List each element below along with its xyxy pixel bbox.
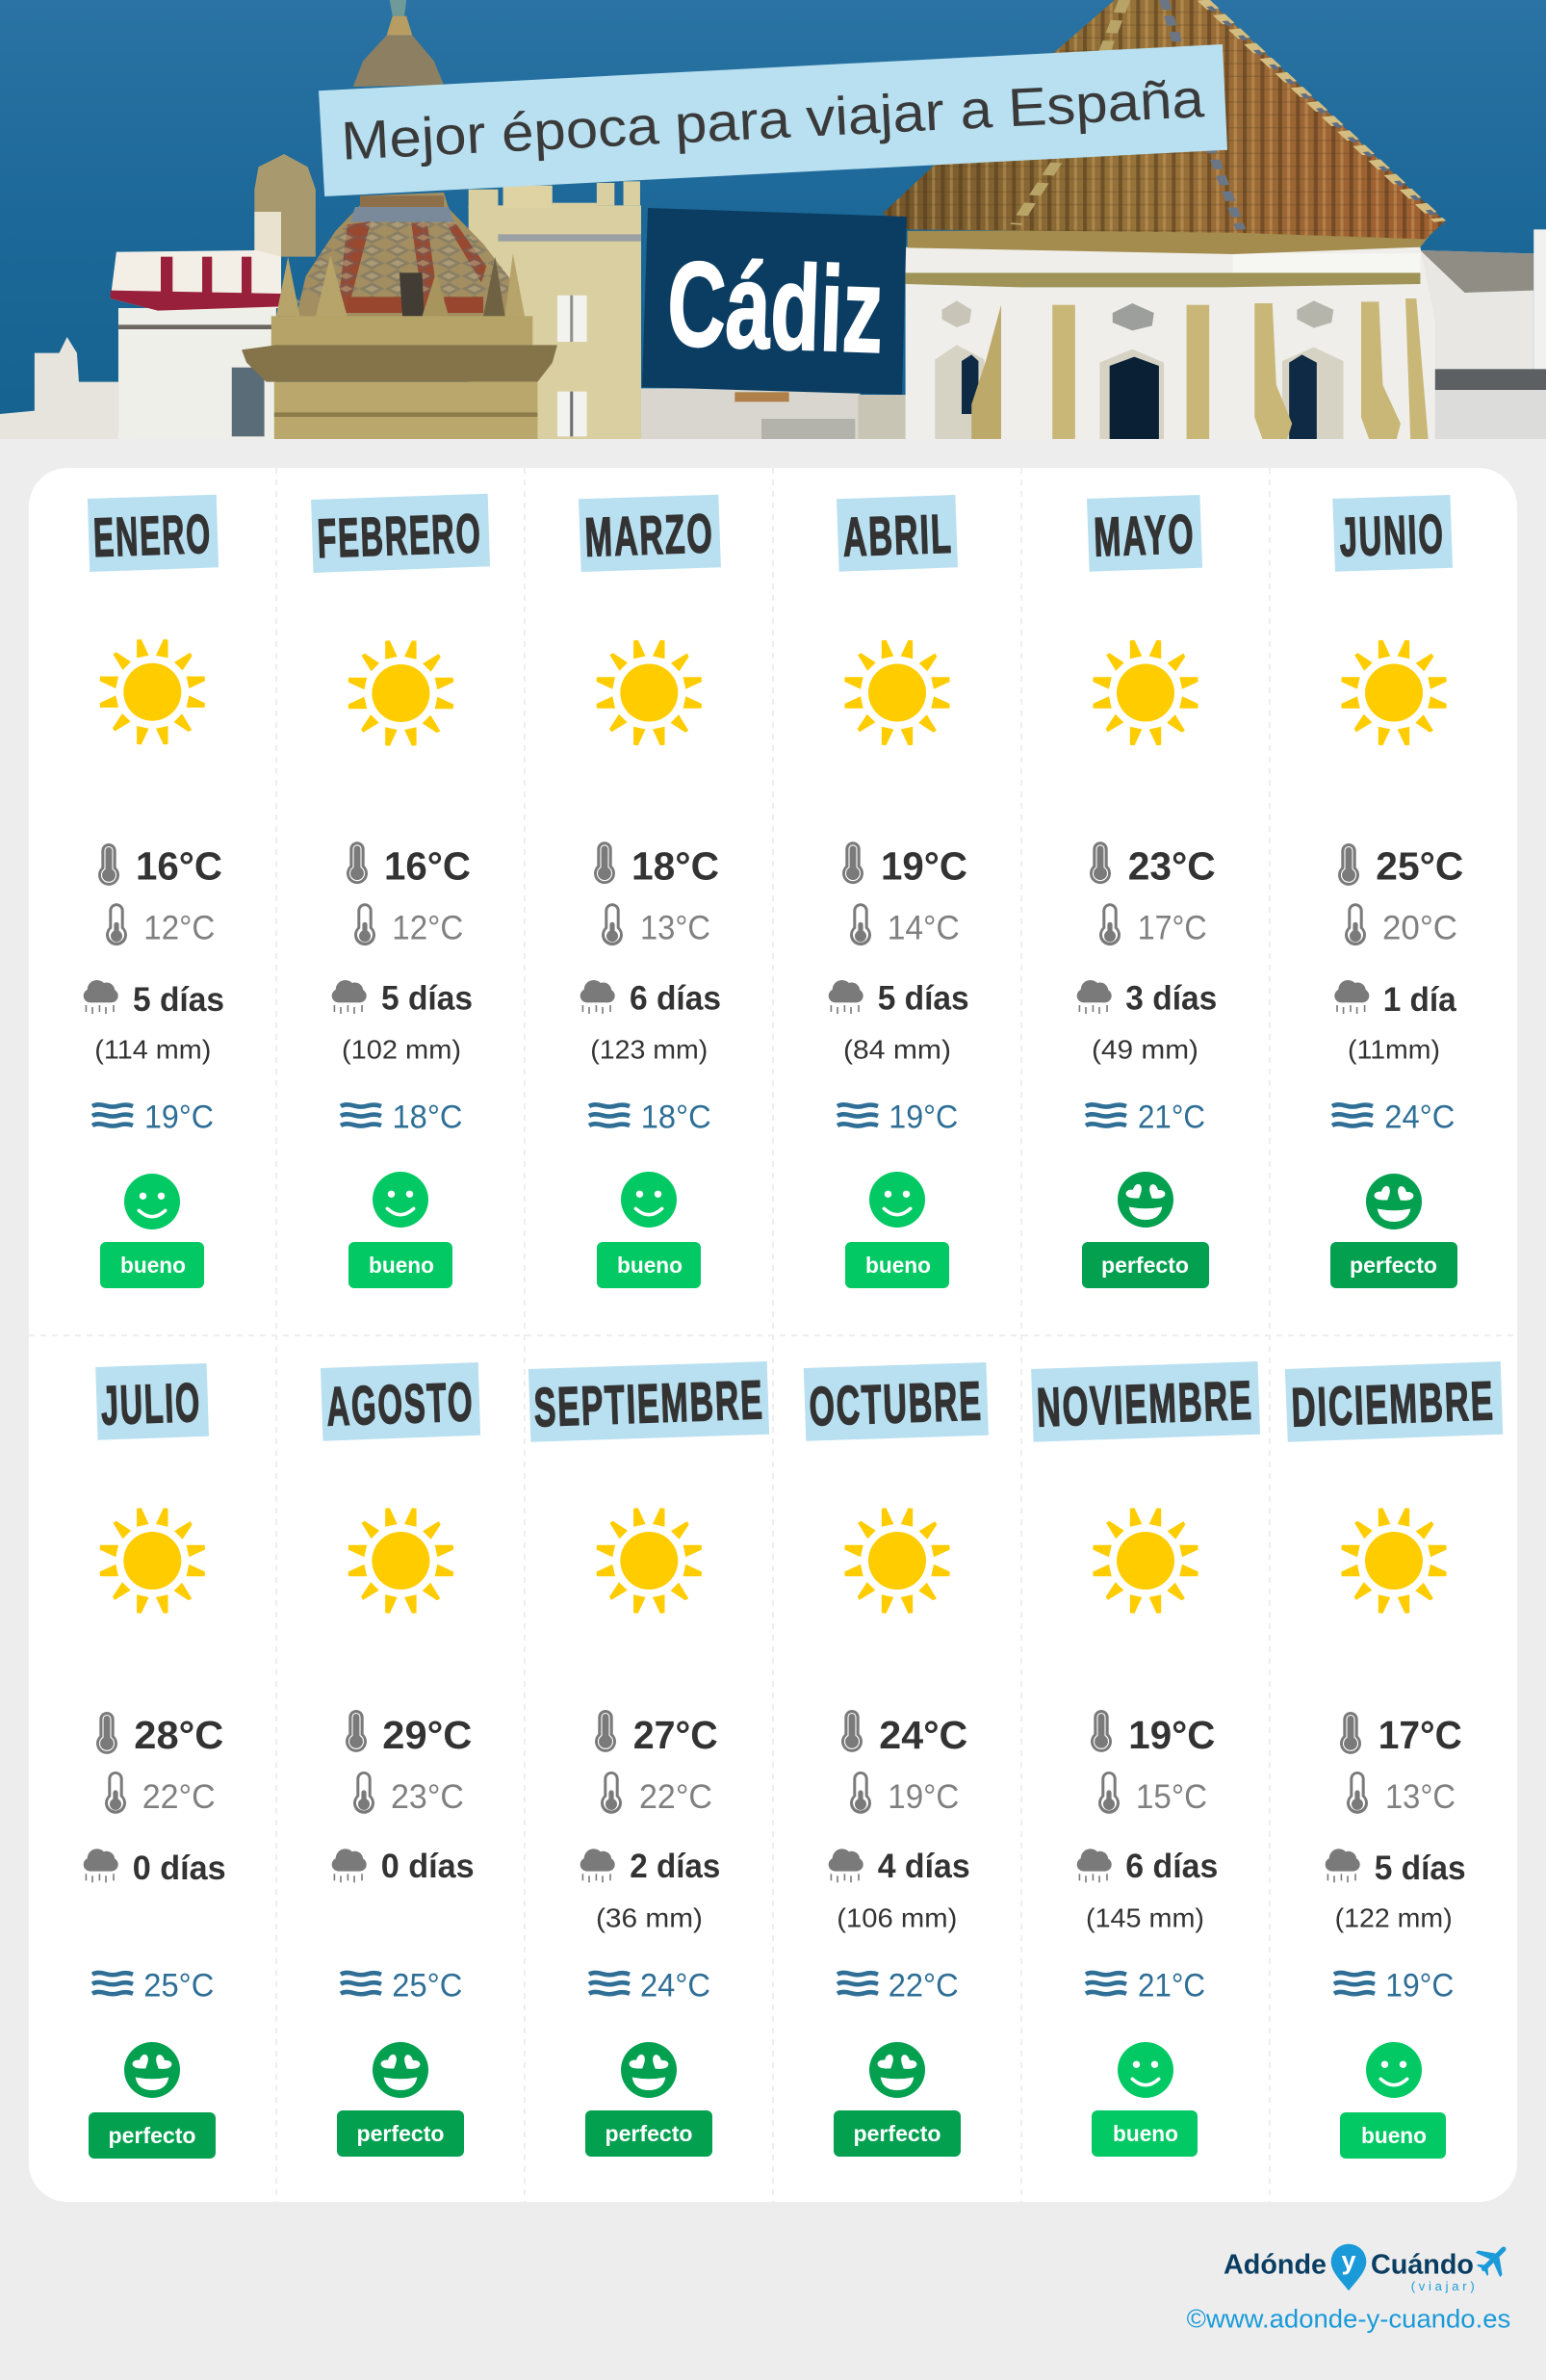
panel: noviembre [1031, 1361, 1260, 2157]
rating badge [845, 1242, 949, 1288]
icon: map pin: y [1341, 2246, 1356, 2275]
icon: sea [341, 1104, 381, 1126]
panel: months table [29, 468, 1517, 2202]
rain days: 0 días [133, 1850, 226, 1887]
rainfall: (36 mm) [596, 1903, 703, 1933]
month label: marzo: MARZO [584, 503, 715, 569]
icon: min temperature [1098, 1772, 1120, 1814]
rating badge [348, 1242, 452, 1288]
icon: rain [84, 1849, 118, 1882]
icon: sea [837, 1973, 878, 1994]
panel: febrero [311, 494, 490, 1288]
icon: sun [1093, 1508, 1198, 1614]
icon: smiley [124, 1174, 180, 1229]
rainfall: (114 mm) [94, 1034, 211, 1064]
rating badge: perfecto [853, 2121, 941, 2146]
rating badge [1340, 2112, 1446, 2159]
month label: noviembre [1031, 1361, 1260, 1442]
icon: min temperature [106, 903, 127, 945]
icon: sea [1334, 1973, 1375, 1994]
panel: agosto [321, 1362, 480, 2157]
max temperature: 16°C [384, 843, 471, 888]
logo: Adónde y Cuándo [1224, 2236, 1517, 2293]
rating badge: bueno [1113, 2121, 1178, 2146]
max temperature: 19°C [1128, 1713, 1215, 1757]
icon: airplane [1470, 2236, 1517, 2283]
icon: sea [589, 1104, 630, 1126]
min temperature: 12°C [143, 910, 215, 947]
rain days: 5 días [381, 979, 473, 1017]
rainfall: (145 mm) [1086, 1903, 1204, 1933]
icon: max temperature [96, 1712, 117, 1754]
rating badge [89, 2112, 216, 2159]
panel: octubre [804, 1362, 989, 2157]
rain days: 2 días [630, 1848, 720, 1885]
icon: min temperature [850, 903, 871, 945]
icon: min temperature [1347, 1772, 1368, 1814]
rain days: 5 días [1375, 1850, 1466, 1887]
month label: marzo [579, 495, 721, 572]
rain days: 1 día [1383, 981, 1456, 1019]
icon: sun [100, 639, 205, 744]
icon: sun [348, 1508, 453, 1614]
rating badge: perfecto [1101, 1253, 1189, 1278]
month label: enero: ENERO [92, 504, 213, 569]
month label: abril: ABRIL [842, 504, 954, 568]
rainfall: (106 mm) [837, 1903, 957, 1933]
panel: diciembre [1285, 1361, 1503, 2159]
month label: abril [837, 495, 958, 572]
icon: max temperature [98, 843, 119, 886]
rating badge: perfecto [108, 2123, 196, 2148]
min temperature: 12°C [392, 910, 463, 947]
month label: agosto: AGOSTO [325, 1371, 475, 1437]
panel: mayo [1077, 495, 1217, 1288]
sea temperature: 18°C [641, 1099, 711, 1136]
rain days: 5 días [133, 981, 224, 1019]
month label: octubre [804, 1362, 989, 1441]
rating badge: perfecto [356, 2121, 445, 2146]
min temperature: 22°C [142, 1778, 216, 1816]
icon: sea [589, 1973, 630, 1994]
rainfall: (84 mm) [843, 1034, 951, 1064]
max temperature: 28°C [134, 1713, 223, 1757]
month label: febrero: FEBRERO [316, 503, 483, 570]
icon: max temperature [347, 841, 368, 884]
panel: abril [829, 495, 969, 1288]
rain days: 3 días [1125, 979, 1217, 1017]
rating badge [100, 1242, 204, 1288]
month label: septiembre [528, 1361, 769, 1442]
rating badge [1330, 1242, 1457, 1288]
icon: min temperature [1099, 903, 1121, 945]
max temperature: 29°C [382, 1713, 472, 1757]
sea temperature: 19°C [1385, 1968, 1454, 2005]
icon: map pin [1331, 2244, 1366, 2290]
icon: min temperature [850, 1772, 871, 1814]
panel: enero [84, 495, 224, 1288]
icon: max temperature [1338, 843, 1359, 886]
sea temperature: 24°C [640, 1968, 710, 2005]
icon: sea [92, 1973, 133, 1994]
sea temperature: 19°C [144, 1099, 214, 1136]
rating badge [337, 2110, 464, 2157]
icon: max temperature [841, 1710, 863, 1752]
icon: sun [844, 1508, 950, 1614]
icon: sun [597, 640, 702, 745]
rain days: 0 días [381, 1848, 475, 1885]
icon: sea [837, 1104, 878, 1126]
max temperature: 18°C [631, 843, 719, 888]
min temperature: 14°C [888, 910, 960, 947]
sea temperature: 21°C [1138, 1099, 1205, 1136]
icon: sea [1086, 1973, 1126, 1994]
icon: sea [92, 1104, 133, 1126]
icon: smiley [621, 1172, 677, 1228]
month label: noviembre: NOVIEMBRE [1036, 1370, 1254, 1438]
max temperature: 19°C [881, 843, 967, 888]
panel: julio [84, 1363, 226, 2159]
icon: sea [1086, 1104, 1126, 1126]
rainfall: (122 mm) [1335, 1903, 1453, 1933]
sea temperature: 24°C [1384, 1099, 1455, 1136]
icon: smiley [124, 2042, 180, 2098]
icon: smiley [1118, 1172, 1173, 1228]
title banner: Mejor época para viajar a España [340, 67, 1206, 171]
rain days: 6 días [1125, 1848, 1218, 1885]
month label: mayo: MAYO [1093, 504, 1196, 568]
rating badge: bueno [617, 1253, 683, 1278]
icon: smiley [1366, 1174, 1422, 1229]
sea temperature: 22°C [889, 1968, 959, 2005]
rating badge: perfecto [1350, 1253, 1437, 1278]
rating badge [585, 2110, 712, 2157]
icon: min temperature [601, 1772, 622, 1814]
sea temperature: 25°C [392, 1968, 462, 2005]
rating badge: perfecto [605, 2121, 693, 2146]
logo: Adónde y Cuándo: Cuándo [1371, 2250, 1474, 2281]
logo: Adónde y Cuándo: Adónde [1224, 2250, 1327, 2281]
month label: junio [1332, 495, 1453, 572]
rain days: 4 días [878, 1848, 970, 1885]
min temperature: 20°C [1382, 910, 1457, 947]
icon: smiley [869, 1172, 925, 1228]
max temperature: 17°C [1379, 1713, 1462, 1757]
icon: sea [341, 1973, 381, 1994]
rain days: 5 días [878, 979, 969, 1017]
panel: junio [1330, 495, 1463, 1288]
min temperature: 17°C [1138, 910, 1207, 947]
sea temperature: 19°C [889, 1099, 958, 1136]
icon: max temperature [1091, 1710, 1112, 1752]
max temperature: 27°C [633, 1713, 718, 1757]
icon: min temperature [1345, 903, 1366, 945]
icon: smiley [373, 1172, 428, 1228]
max temperature: 25°C [1376, 843, 1463, 888]
max temperature: 16°C [136, 843, 222, 888]
rating badge: bueno [120, 1253, 186, 1278]
rating badge [834, 2110, 961, 2157]
logo: Adónde y Cuándo: (viajar) [1411, 2279, 1475, 2293]
icon: rain [1077, 1849, 1112, 1882]
sea temperature: 25°C [143, 1968, 214, 2005]
sea temperature: 21°C [1138, 1968, 1205, 2005]
icon: min temperature [353, 1772, 374, 1814]
icon: smiley [1118, 2042, 1173, 2098]
rating badge: bueno [1361, 2123, 1427, 2148]
icon: max temperature [842, 841, 863, 884]
icon: rain [84, 980, 118, 1014]
month label: julio: JULIO [100, 1372, 202, 1436]
month label: junio: JUNIO [1339, 504, 1446, 568]
rating badge: bueno [369, 1253, 434, 1278]
icon: rain [1334, 980, 1369, 1014]
month label: mayo [1087, 495, 1202, 572]
city name box [642, 208, 907, 395]
icon: max temperature [1090, 841, 1111, 884]
rainfall: (11mm) [1348, 1034, 1440, 1064]
panel: marzo [579, 495, 721, 1288]
icon: sun [1341, 1508, 1447, 1614]
icon: smiley [621, 2042, 677, 2098]
icon: max temperature [594, 841, 615, 884]
min temperature: 23°C [391, 1778, 464, 1816]
rating badge: bueno [865, 1253, 931, 1278]
icon: smiley [869, 2042, 925, 2098]
rain days: 6 días [630, 979, 721, 1017]
min temperature: 13°C [1385, 1778, 1456, 1816]
icon: max temperature [346, 1710, 367, 1752]
icon: sun [597, 1508, 702, 1614]
icon: sun [844, 640, 950, 745]
title banner [319, 44, 1227, 196]
min temperature: 22°C [639, 1778, 712, 1816]
month label: octubre: OCTUBRE [809, 1370, 984, 1437]
rating badge [1082, 1242, 1209, 1288]
max temperature: 23°C [1128, 843, 1216, 888]
sea temperature: 18°C [393, 1099, 462, 1136]
month label: julio [95, 1363, 209, 1440]
min temperature: 19°C [888, 1778, 959, 1816]
icon: smiley [373, 2042, 428, 2098]
icon: max temperature [595, 1710, 616, 1752]
icon: sun [1093, 640, 1198, 745]
icon: max temperature [1340, 1712, 1361, 1754]
icon: min temperature [354, 903, 375, 945]
month label: septiembre: SEPTIEMBRE [533, 1369, 765, 1438]
icon: rain [332, 1849, 367, 1882]
icon: min temperature [602, 903, 623, 945]
icon: min temperature [105, 1772, 126, 1814]
month label: enero [88, 495, 219, 572]
header photo: Cádiz rooftops and sea [0, 0, 1546, 439]
month label: agosto [321, 1362, 480, 1441]
rainfall: (123 mm) [590, 1034, 708, 1064]
icon: rain [332, 980, 367, 1014]
icon: sun [348, 640, 453, 746]
icon: sea [1332, 1104, 1373, 1126]
icon: rain [829, 980, 863, 1014]
icon: rain [1326, 1849, 1360, 1882]
month label: febrero [311, 494, 490, 573]
website credit: ©www.adonde-y-cuando.es [1187, 2305, 1510, 2334]
icon: sun [1341, 640, 1447, 745]
icon: smiley [1366, 2042, 1422, 2098]
icon: rain [1077, 980, 1112, 1014]
min temperature: 13°C [640, 910, 710, 947]
max temperature: 24°C [879, 1713, 967, 1757]
min temperature: 15°C [1136, 1778, 1207, 1816]
rating badge [597, 1242, 701, 1288]
icon: rain [829, 1849, 863, 1882]
city name box: Cádiz [665, 237, 886, 378]
icon: rain [580, 980, 615, 1014]
rainfall: (102 mm) [342, 1034, 461, 1064]
rating badge [1092, 2110, 1198, 2157]
icon: rain [580, 1849, 615, 1882]
rainfall: (49 mm) [1092, 1034, 1198, 1064]
icon: sun [100, 1508, 205, 1614]
panel: septiembre [528, 1361, 769, 2157]
